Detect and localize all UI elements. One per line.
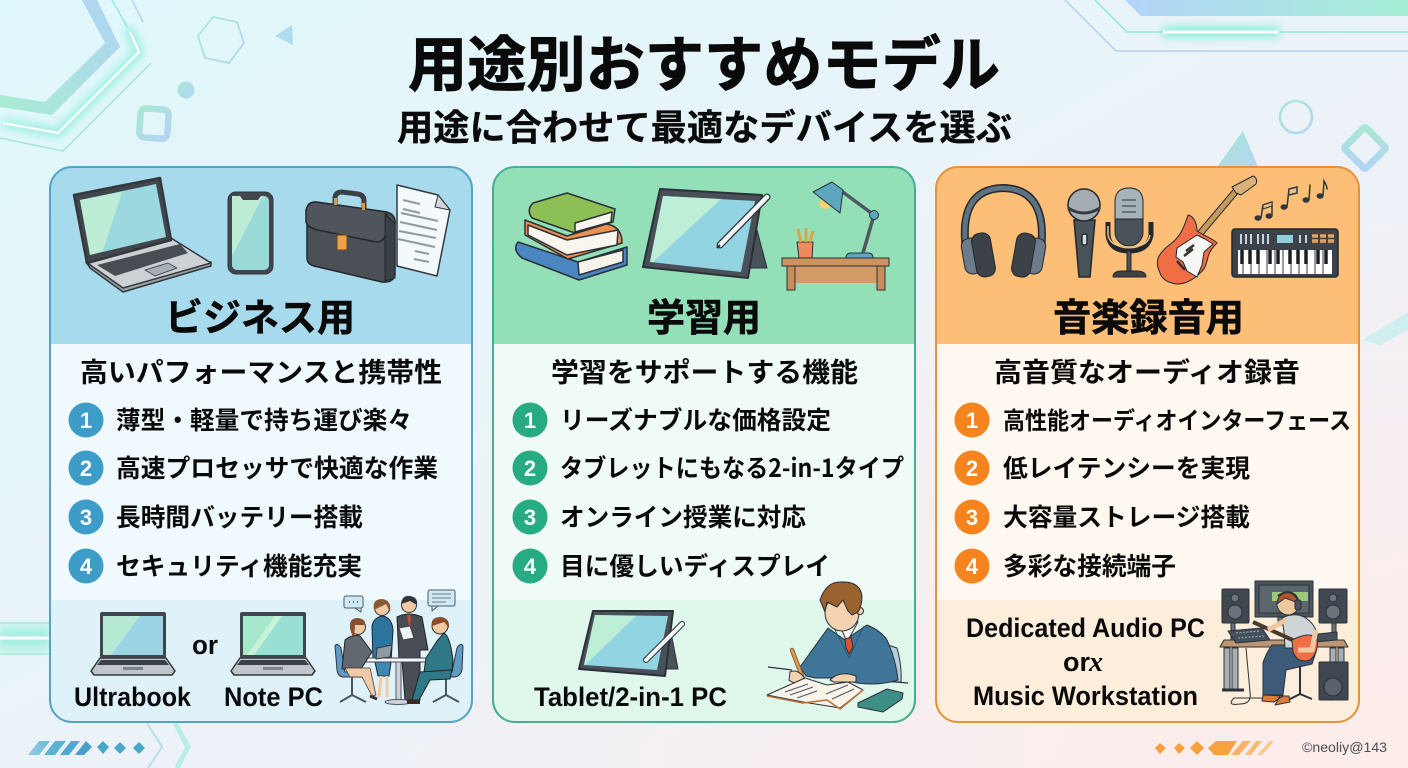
panel: study: [493, 167, 915, 722]
decoration: side and bottom accents: [0, 312, 1408, 768]
icon: books: [516, 193, 627, 280]
heading: 高いパフォーマンスと携帯性: [80, 351, 442, 390]
icon: headphones: [960, 188, 1047, 278]
decoration: top-right circuit lines: [1065, 0, 1408, 169]
decoration: bottom-right stripes: [1155, 741, 1274, 755]
icon: electric guitar: [1157, 176, 1257, 284]
feature list: オンライン授業に対応: [560, 498, 806, 534]
feature list: 4: [524, 554, 537, 579]
feature list: 2: [80, 456, 92, 481]
decoration: top-left hexagon frame: [0, 0, 293, 151]
title: 用途別おすすめモデル: [408, 17, 1000, 104]
feature list: 1: [966, 408, 978, 433]
feature list: 大容量ストレージ搭載: [1003, 498, 1250, 534]
panel title: ビジネス用: [165, 287, 355, 342]
panel: business: [50, 167, 472, 722]
illustration: business meeting: [335, 590, 463, 704]
device labels: x: [1088, 647, 1103, 678]
icon: music notes: [1255, 181, 1327, 220]
icon: briefcase: [306, 192, 395, 282]
heading: 学習をサポートする機能: [551, 351, 858, 390]
feature list: 3: [524, 505, 536, 530]
device labels: Music Workstation: [973, 681, 1198, 711]
label: note pc: Note PC: [224, 682, 323, 712]
subtitle: 用途に合わせて最適なデバイスを選ぶ: [397, 99, 1012, 151]
panel title: 音楽録音用: [1053, 287, 1244, 342]
feature list: 目に優しいディスプレイ: [560, 547, 830, 583]
feature list: 4: [966, 554, 979, 579]
feature list: 薄型・軽量で持ち運び楽々: [116, 401, 412, 437]
label: tablet: Tablet/2-in-1 PC: [534, 682, 727, 712]
feature list: [512, 401, 904, 584]
feature list: 高性能オーディオインターフェース: [1003, 401, 1351, 436]
or label: or: [192, 630, 218, 660]
icon: smartphone: [228, 192, 273, 274]
icon: studio microphone: [1108, 188, 1151, 277]
icon: document: [397, 185, 450, 276]
icon: tablet with stylus: [643, 189, 767, 278]
feature list: 1: [80, 408, 92, 433]
feature list: 3: [80, 505, 92, 530]
panel: music recording: [936, 167, 1359, 722]
device labels: Dedicated Audio PC: [966, 613, 1205, 643]
illustration: musician in studio: [1220, 581, 1348, 705]
feature list: 1: [524, 408, 536, 433]
device labels: or: [1063, 647, 1090, 677]
label: ultrabook: Ultrabook: [74, 682, 192, 712]
feature list: 多彩な接続端子: [1003, 547, 1176, 583]
icon: ultrabook: [91, 612, 175, 675]
feature list: 2: [524, 456, 536, 481]
device labels: [966, 613, 1205, 711]
decoration: bottom-left stripes: [28, 741, 145, 755]
copyright: ©neoliy@143: [1302, 739, 1387, 755]
heading: 高音質なオーディオ録音: [994, 351, 1300, 390]
feature list: タブレットにもなる2-in-1タイプ: [560, 449, 904, 485]
feature list: [68, 401, 438, 584]
feature list: 高速プロセッサで快適な作業: [116, 449, 438, 485]
feature list: 長時間バッテリー搭載: [116, 498, 363, 534]
feature list: 3: [966, 505, 978, 530]
icon: desk with lamp: [782, 182, 889, 290]
feature list: 2: [966, 456, 978, 481]
icon: note pc: [231, 612, 315, 675]
feature list: [954, 401, 1351, 584]
feature list: セキュリティ機能充実: [116, 547, 362, 583]
feature list: 低レイテンシーを実現: [1003, 449, 1250, 485]
feature list: リーズナブルな価格設定: [560, 401, 831, 437]
icon: MIDI keyboard: [1232, 229, 1338, 277]
icon: handheld microphone: [1068, 189, 1100, 277]
panel title: 学習用: [647, 287, 761, 342]
feature list: 4: [80, 554, 93, 579]
icon: laptop: [74, 178, 211, 292]
illustration: student: [767, 582, 908, 712]
icon: tablet: [579, 611, 682, 676]
